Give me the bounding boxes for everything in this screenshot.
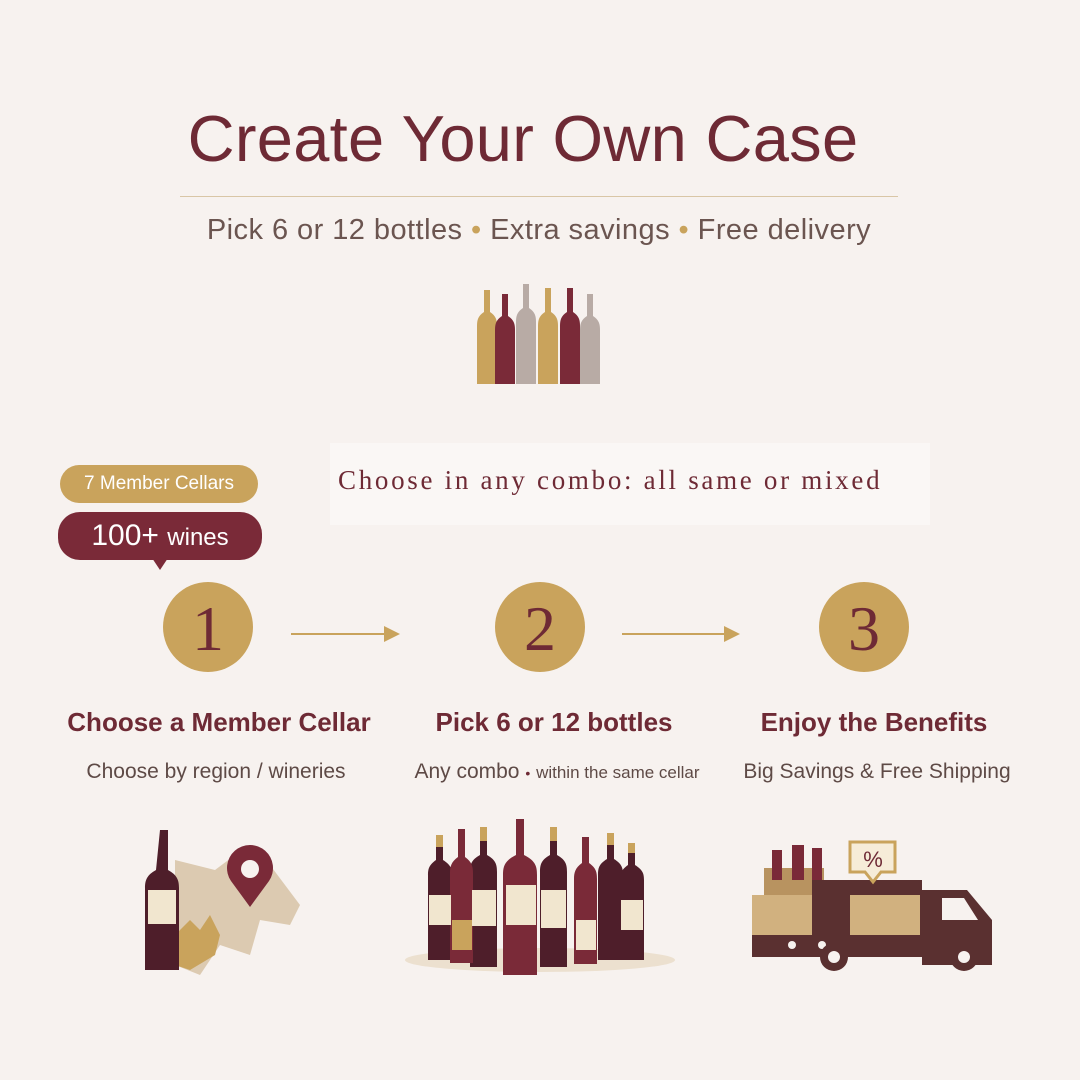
callout box: combo [330,443,930,525]
subtitle [180,196,898,247]
title: Create Your Own Case [188,102,858,175]
circle 1 [163,582,253,672]
icon: bottle with map [144,830,300,975]
circle 1: 1 [192,593,224,664]
circle 2 [495,582,585,672]
pill: 100+ wines: 100+ wines [91,519,229,552]
step 2 heading: Pick 6 or 12 bottles [436,707,672,737]
arrow 2 [622,626,740,642]
icon: delivery truck [752,840,992,971]
step 3 heading: Enjoy the Benefits [761,707,987,737]
icon: delivery truck: % [863,847,883,872]
circle 3: 3 [848,593,880,664]
step 3 text: Big Savings & Free Shipping [743,760,1011,783]
circle 3 [819,582,909,672]
pill: member cellars: 7 Member Cellars [84,473,234,494]
subtitle: Pick 6 or 12 bottles • Extra savings • Free delivery [207,214,871,246]
arrow 1 [291,626,400,642]
step circles and arrows [163,582,909,672]
pill: member cellars [60,465,258,503]
step 1 text: Choose by region / wineries [86,760,346,783]
pill: 100+ wines [58,512,262,560]
icon: group of bottles [405,819,675,975]
step 2 text: Any combo • within the same cellar [414,760,700,783]
callout text: Choose in any combo: all same or mixed [338,465,882,495]
circle 2: 2 [524,593,556,664]
step 1 heading: Choose a Member Cellar [67,707,371,737]
icon: bottles header [477,284,600,384]
